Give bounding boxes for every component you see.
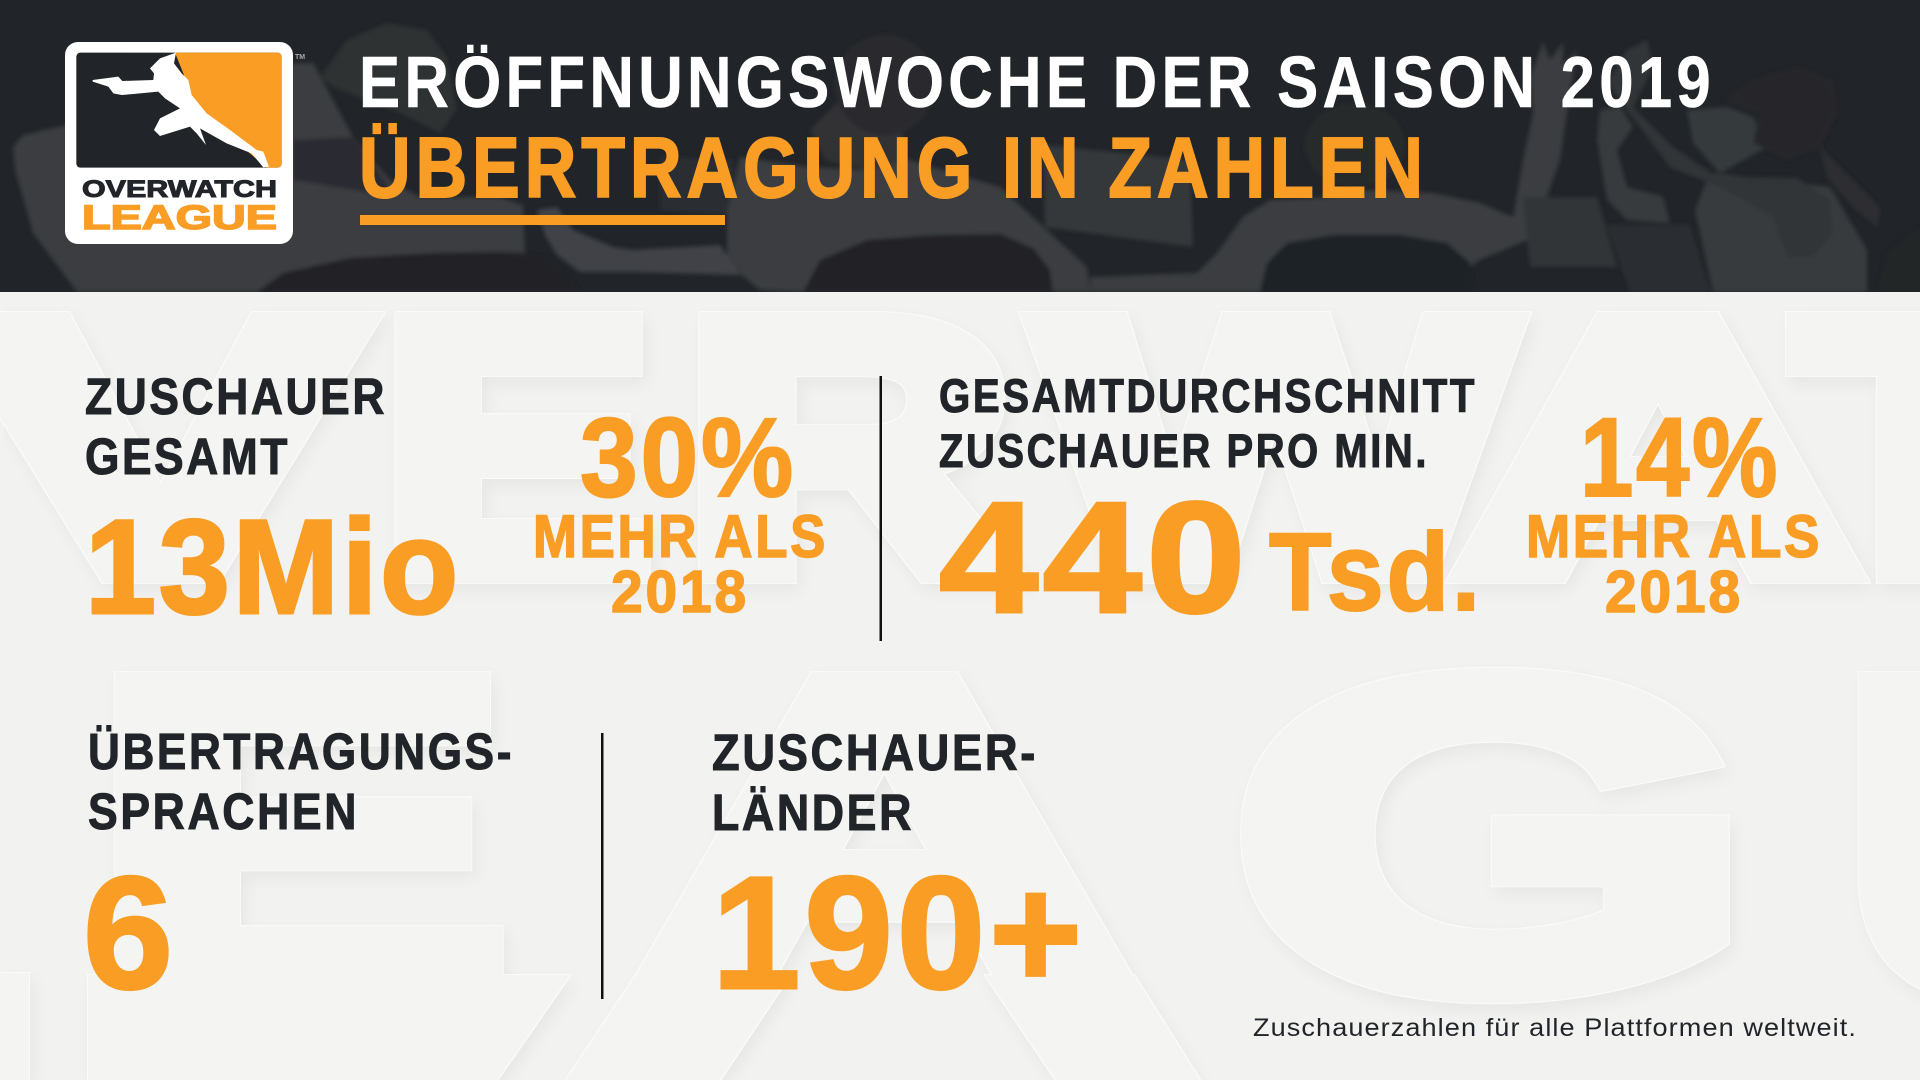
panel: total viewers: GESAMT [85, 428, 290, 485]
panel: total viewers: ZUSCHAUER [85, 368, 387, 425]
logo: Overwatch League [65, 42, 305, 244]
trademark: TM [295, 54, 305, 61]
panel: broadcast languages: 6 [83, 843, 173, 1022]
background watermark lettering [0, 247, 1920, 1080]
stat: 30 percent more than 2018: 2018 [611, 559, 749, 625]
panel: average minute audience: 440 [939, 470, 1250, 646]
stat: 14 percent more than 2018: 14% [1580, 395, 1780, 520]
stat: 30 percent more than 2018: MEHR ALS [533, 503, 828, 570]
background watermark lettering: E [90, 590, 510, 1080]
stat: 14 percent more than 2018: MEHR ALS [1526, 503, 1822, 570]
photo: player with raised arm [1090, 42, 1577, 292]
header banner with darkened team photo [0, 0, 1920, 292]
photo: dim monitor [660, 157, 733, 215]
divider [601, 733, 604, 999]
photo: monitor [1043, 145, 1193, 247]
photo: chairs [257, 252, 580, 292]
title [359, 43, 1715, 216]
panel: viewer countries: LÄNDER [712, 784, 914, 841]
panel: average minute audience: GESAMTDURCHSCHNITT [939, 369, 1477, 422]
background watermark lettering: A [1458, 247, 1858, 648]
photo: centre player [727, 157, 1090, 292]
panel: average minute audience: ZUSCHAUER PRO MIN. [939, 424, 1429, 477]
stat: 30 percent more than 2018: 30% [580, 395, 796, 520]
photo: left player [13, 63, 525, 292]
panel: viewer countries: ZUSCHAUER- [712, 724, 1038, 781]
panel: viewer countries: 190+ [712, 843, 1086, 1022]
background watermark lettering: A [632, 590, 1137, 1080]
logo wordmark: OVERWATCH [82, 176, 277, 203]
logo wordmark [82, 176, 277, 237]
title: ERÖFFNUNGSWOCHE DER SAISON 2019 [359, 43, 1715, 123]
panel: viewer countries [712, 724, 1086, 1022]
logo emblem [76, 53, 282, 168]
title underline [360, 215, 725, 225]
footnote: Zuschauerzahlen für alle Plattformen weltweit. [1253, 1014, 1857, 1042]
panel: total viewers [85, 368, 461, 642]
photo: side monitor and laptop [1523, 197, 1617, 267]
panel: average minute audience [939, 369, 1483, 646]
panel: broadcast languages: SPRACHEN [88, 783, 359, 840]
panel: broadcast languages: ÜBERTRAGUNGS- [88, 723, 514, 780]
panel: total viewers: 13Mio [85, 493, 461, 642]
divider [880, 376, 882, 641]
stat: 30 percent more than 2018 [533, 395, 828, 625]
title: ÜBERTRAGUNG IN ZAHLEN [359, 121, 1428, 216]
background watermark lettering: W [1040, 247, 1515, 648]
logo wordmark: LEAGUE [82, 199, 277, 237]
background watermark lettering: E [382, 247, 652, 648]
photo: right players [1597, 107, 1670, 223]
panel: average minute audience: Tsd. [1269, 511, 1483, 634]
page background [0, 292, 1920, 1080]
stat: 14 percent more than 2018 [1526, 395, 1822, 625]
panel: broadcast languages [83, 723, 514, 1022]
background watermark lettering: R [684, 247, 1014, 648]
background watermark lettering: G [1232, 590, 1752, 1080]
stat: 14 percent more than 2018: 2018 [1605, 559, 1743, 625]
